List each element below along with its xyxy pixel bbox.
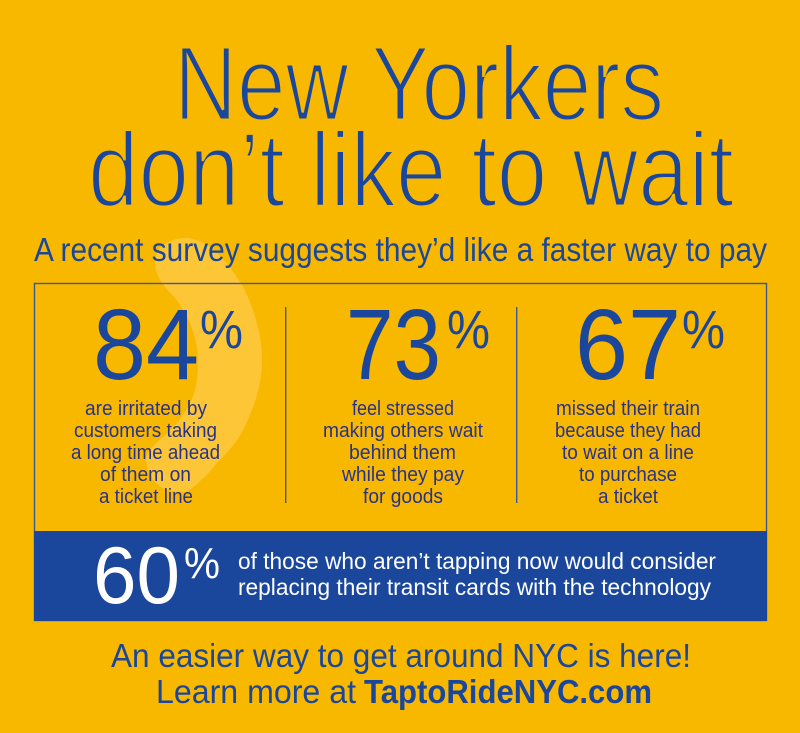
stat: 67%: a ticket	[598, 486, 658, 508]
divider left	[285, 307, 286, 503]
blue band: 60%: %	[184, 539, 220, 588]
stat: 73%: %	[447, 300, 490, 360]
stat: 84%: of them on	[100, 464, 191, 486]
stat: 67%: missed their train	[556, 398, 700, 420]
blue band: 60%: 60	[93, 531, 180, 621]
stat: 67%: to wait on a line	[562, 442, 694, 464]
footer call to action: An easier way to get around NYC is here!	[111, 637, 691, 674]
blue band: 60%: replacing their transit cards with the technology	[238, 574, 711, 600]
stat: 73%: for goods	[363, 486, 443, 508]
title: New Yorkers	[174, 25, 664, 143]
footer call to action: Learn more at	[156, 673, 356, 710]
stat: 67%: because they had	[555, 420, 701, 442]
stat: 67%: %	[682, 300, 725, 360]
stat: 84%: 84	[93, 289, 199, 401]
divider right	[516, 307, 517, 503]
stat: 84%	[71, 289, 243, 508]
stat: 73%: feel stressed	[352, 398, 454, 420]
stat: 84%: customers taking	[74, 420, 217, 442]
statistics panel	[34, 284, 766, 620]
blue band: 60%	[34, 531, 767, 621]
blue band: 60%: of those who aren’t tapping now would consider	[238, 548, 716, 574]
decorative swoosh	[146, 238, 262, 492]
stat: 73%: 73	[346, 289, 441, 401]
stat: 73%: behind them	[349, 442, 456, 464]
stat: 67%: 67	[575, 289, 681, 401]
stat: 84%: a long time ahead	[71, 442, 220, 464]
stat: 73%	[323, 289, 490, 508]
footer call to action: TaptoRideNYC.com	[364, 673, 652, 710]
stat: 67%: to purchase	[579, 464, 677, 486]
stat: 84%: %	[200, 300, 243, 360]
stat: 84%: are irritated by	[85, 398, 207, 420]
stat: 73%: making others wait	[323, 420, 483, 442]
stat: 84%: a ticket line	[99, 486, 193, 508]
footer call to action	[111, 637, 691, 710]
title	[88, 25, 734, 229]
stat: 67%	[555, 289, 725, 508]
stat: 73%: while they pay	[341, 464, 464, 486]
